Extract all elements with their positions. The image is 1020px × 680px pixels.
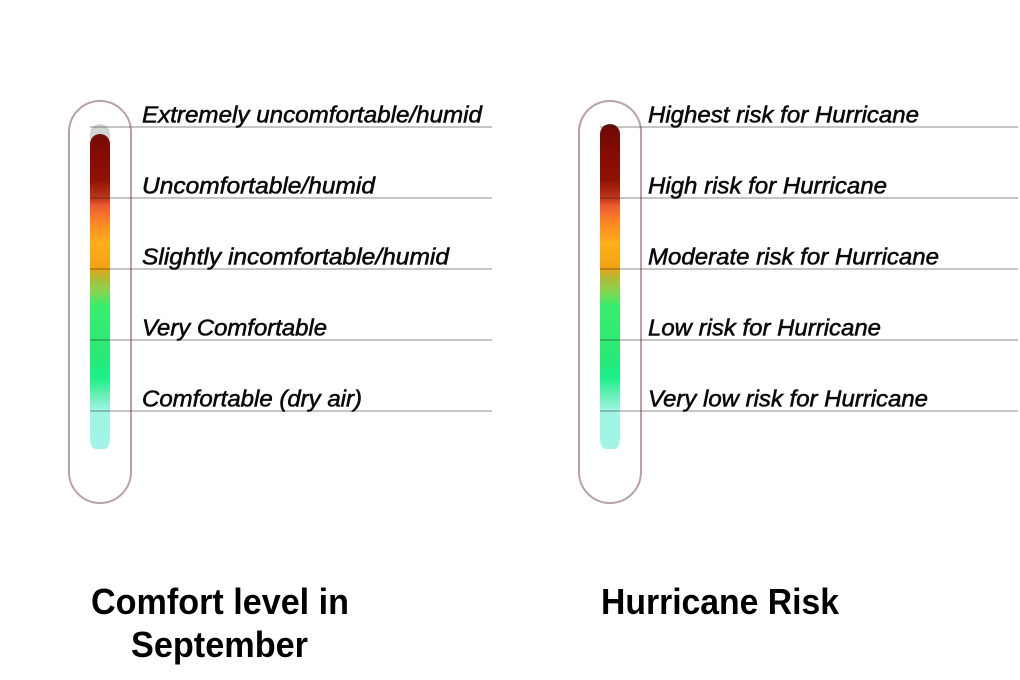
- empty gauge cap: comfort: [90, 124, 110, 140]
- level labels: hurricane: Moderate risk for Hurricane: [648, 244, 939, 270]
- panel: hurricane risk: [579, 101, 1018, 503]
- level labels: comfort: [142, 102, 483, 412]
- level labels: comfort: Extremely uncomfortable/humid: [142, 102, 483, 128]
- level labels: hurricane: Highest risk for Hurricane: [648, 102, 919, 128]
- level rule lines: comfort: [90, 127, 492, 411]
- level labels: hurricane: Very low risk for Hurricane: [648, 386, 928, 412]
- level rule lines: hurricane: [600, 127, 1018, 411]
- level labels: comfort: Slightly incomfortable/humid: [142, 244, 450, 270]
- level labels: hurricane: Low risk for Hurricane: [648, 315, 881, 341]
- heading: hurricane risk: Hurricane Risk: [601, 581, 840, 622]
- gradient gauge bar: hurricane: [600, 124, 620, 449]
- level labels: hurricane: [648, 102, 939, 412]
- panel: comfort level: [69, 101, 492, 503]
- level labels: comfort: Uncomfortable/humid: [142, 173, 376, 199]
- level labels: comfort: Very Comfortable: [142, 315, 327, 341]
- gradient gauge bar: comfort: [90, 134, 110, 449]
- heading: comfort level in September: [91, 581, 349, 665]
- heading: comfort level in September: September: [131, 624, 308, 665]
- thermometer outline: hurricane: [579, 101, 641, 503]
- heading: comfort level in September: Comfort level in: [91, 581, 349, 622]
- level labels: hurricane: High risk for Hurricane: [648, 173, 887, 199]
- thermometer outline: comfort: [69, 101, 131, 503]
- level labels: comfort: Comfortable (dry air): [142, 386, 362, 412]
